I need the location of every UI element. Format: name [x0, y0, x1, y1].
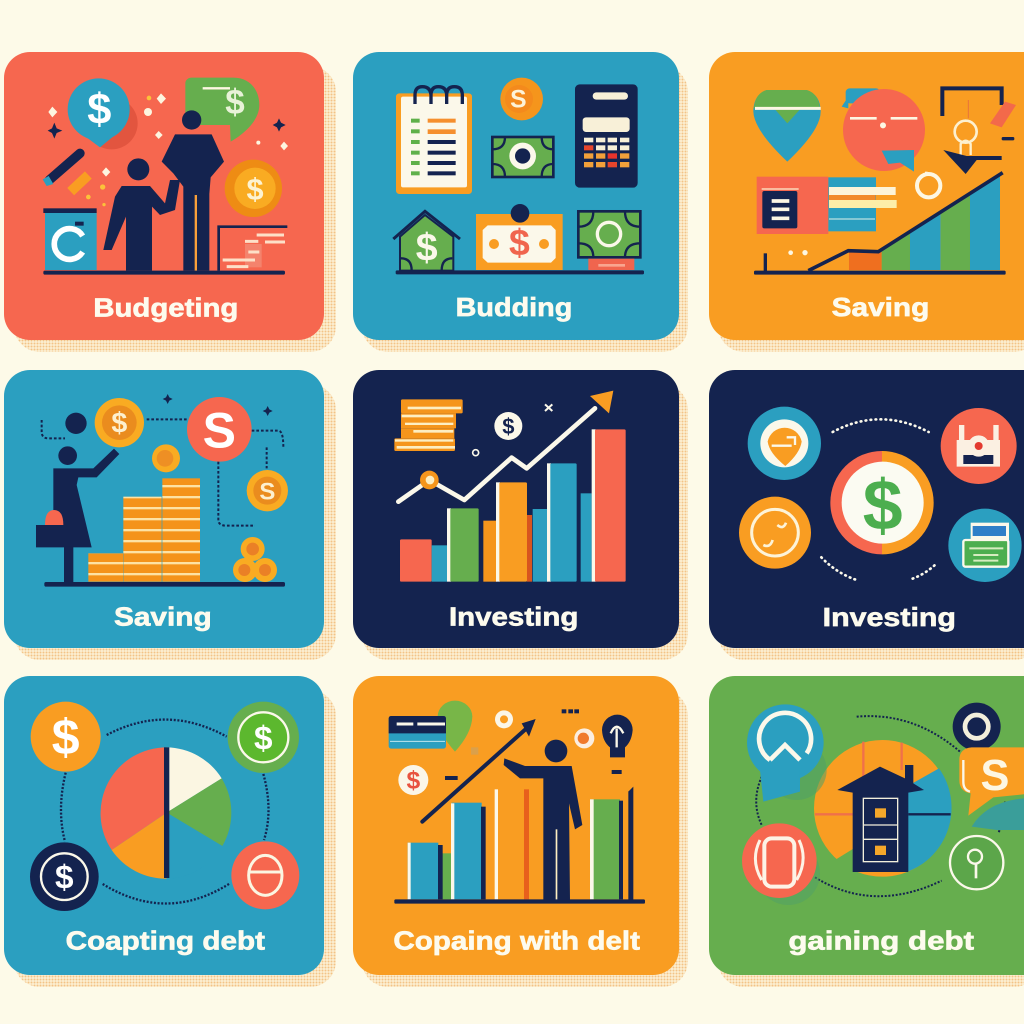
icon: teal dollar bubble	[68, 78, 130, 147]
icon: desk with papers	[219, 227, 287, 271]
icon: card with stripes	[757, 177, 897, 234]
ground line	[394, 899, 645, 904]
label: gaining debt	[788, 925, 974, 955]
icon: eraser	[71, 175, 88, 192]
panel: Saving (teal)	[4, 370, 336, 660]
panel: Investing circles	[709, 370, 1024, 660]
icon: coin pile	[233, 537, 277, 582]
icon: small coin	[152, 444, 180, 472]
icon: coin stack	[394, 399, 463, 451]
icon: coral wallet circle	[941, 408, 1017, 484]
icon: gold coin: $	[246, 172, 264, 206]
pie chart	[101, 747, 231, 879]
ground line	[43, 271, 285, 275]
icon: teal card circle	[948, 509, 1022, 582]
panel: Saving (orange)	[709, 52, 1024, 352]
icon: dollar token: $	[502, 414, 514, 439]
icon: teal box	[43, 208, 97, 270]
label: Saving	[832, 292, 929, 322]
icon: teal blob	[972, 798, 1024, 830]
sparkles	[48, 93, 288, 206]
label: Budding	[456, 292, 572, 322]
sparkles	[163, 394, 273, 416]
small marks	[473, 404, 552, 456]
icon: dollar badge	[398, 765, 428, 795]
icon: coin stacks	[88, 478, 200, 582]
icon: central dollar	[830, 451, 934, 554]
bar chart	[408, 787, 633, 900]
icon: central map circle	[814, 740, 952, 880]
icon: green dollar bubble	[185, 78, 259, 142]
icon: woman with bag	[36, 413, 119, 584]
icon: coral speech bubble	[842, 88, 925, 172]
label: Saving	[114, 601, 212, 631]
icon: person pointing	[504, 740, 582, 900]
icon: orange ring circle	[739, 497, 811, 569]
icon: large coin	[95, 398, 144, 447]
icon: teal pin circle	[748, 407, 821, 480]
icon: ring	[917, 172, 940, 197]
dotted arcs	[821, 419, 937, 580]
icon: light bulb	[602, 715, 633, 757]
icon: navy target	[953, 703, 1001, 751]
icon: central dollar: $	[863, 465, 903, 545]
icon: right coin	[247, 470, 288, 511]
icon: lamp bracket	[942, 88, 1016, 174]
panel: Investing chart	[353, 370, 688, 660]
label: Coapting debt	[66, 925, 265, 955]
label: Copaing with delt	[393, 925, 640, 955]
icon: right coin: S	[259, 478, 275, 505]
icon: gold coin	[225, 160, 282, 217]
icon: adult silhouette	[162, 110, 224, 271]
ground line	[754, 271, 1006, 275]
icon: calculator	[575, 84, 638, 188]
icon: coral dollar circle	[187, 397, 252, 462]
icon: navy dollar: $	[55, 860, 74, 897]
dotted ring	[756, 716, 1005, 896]
panel: Coapting debt	[4, 676, 336, 987]
panel: gaining debt	[709, 676, 1024, 987]
icon: orange dollar	[31, 702, 101, 772]
icon: coral theta	[231, 841, 299, 909]
icon: child silhouette	[103, 158, 180, 271]
icon: orange banknote: $	[509, 221, 530, 263]
icon: orange dollar bubble	[959, 747, 1024, 816]
icon: orange dollar bubble: S	[981, 752, 1009, 800]
icon: green pin	[438, 701, 472, 752]
icon: coral phone circle	[742, 823, 820, 905]
icon: navy house	[837, 765, 924, 872]
icon: navy dollar	[30, 842, 99, 911]
icon: green dollar	[228, 702, 299, 773]
icon: teal gauge bubble	[747, 704, 827, 802]
label: Investing	[449, 601, 578, 631]
label: Investing	[823, 602, 956, 632]
panel: Copaing with delt	[353, 676, 688, 987]
icon: coral dollar circle: S	[203, 402, 236, 458]
arrow: rising	[422, 719, 536, 822]
icon: gear	[495, 710, 513, 728]
icon: pencil	[43, 153, 80, 186]
panel: Budding	[353, 52, 688, 352]
icon: green dollar: $	[254, 720, 273, 757]
icon: credit card	[389, 716, 446, 749]
icon: teal dollar bubble: $	[87, 86, 111, 134]
icon: orange coin	[500, 78, 543, 120]
icon: large coin: $	[111, 408, 127, 440]
icon: green dollar bubble: $	[225, 83, 245, 122]
icon: dollar badge: $	[406, 768, 420, 795]
icon: green note with stack	[578, 211, 640, 270]
icon: house with dollar: $	[416, 226, 438, 270]
icon: dollar ring	[950, 836, 1003, 889]
label: Budgeting	[93, 293, 238, 323]
ground line	[396, 270, 644, 274]
bar chart	[400, 429, 626, 582]
icon: orange dollar: $	[52, 710, 80, 766]
small marks	[445, 709, 622, 780]
dotted ring	[61, 720, 269, 903]
icon: house with dollar	[393, 211, 460, 271]
icon: green banknote	[492, 137, 553, 177]
chart: rising area bars	[764, 173, 1003, 272]
arrow: growth line	[398, 391, 613, 502]
icon: shield heart	[753, 90, 821, 162]
ground line	[44, 582, 285, 587]
icon: orange banknote	[476, 204, 563, 270]
icon: checklist notepad	[396, 87, 472, 194]
icon: orange coin: S	[510, 87, 527, 114]
panel: Budgeting	[4, 52, 336, 352]
icon: clock badge	[574, 728, 594, 748]
icon: dollar token	[494, 412, 522, 440]
dotted connectors	[42, 419, 283, 526]
